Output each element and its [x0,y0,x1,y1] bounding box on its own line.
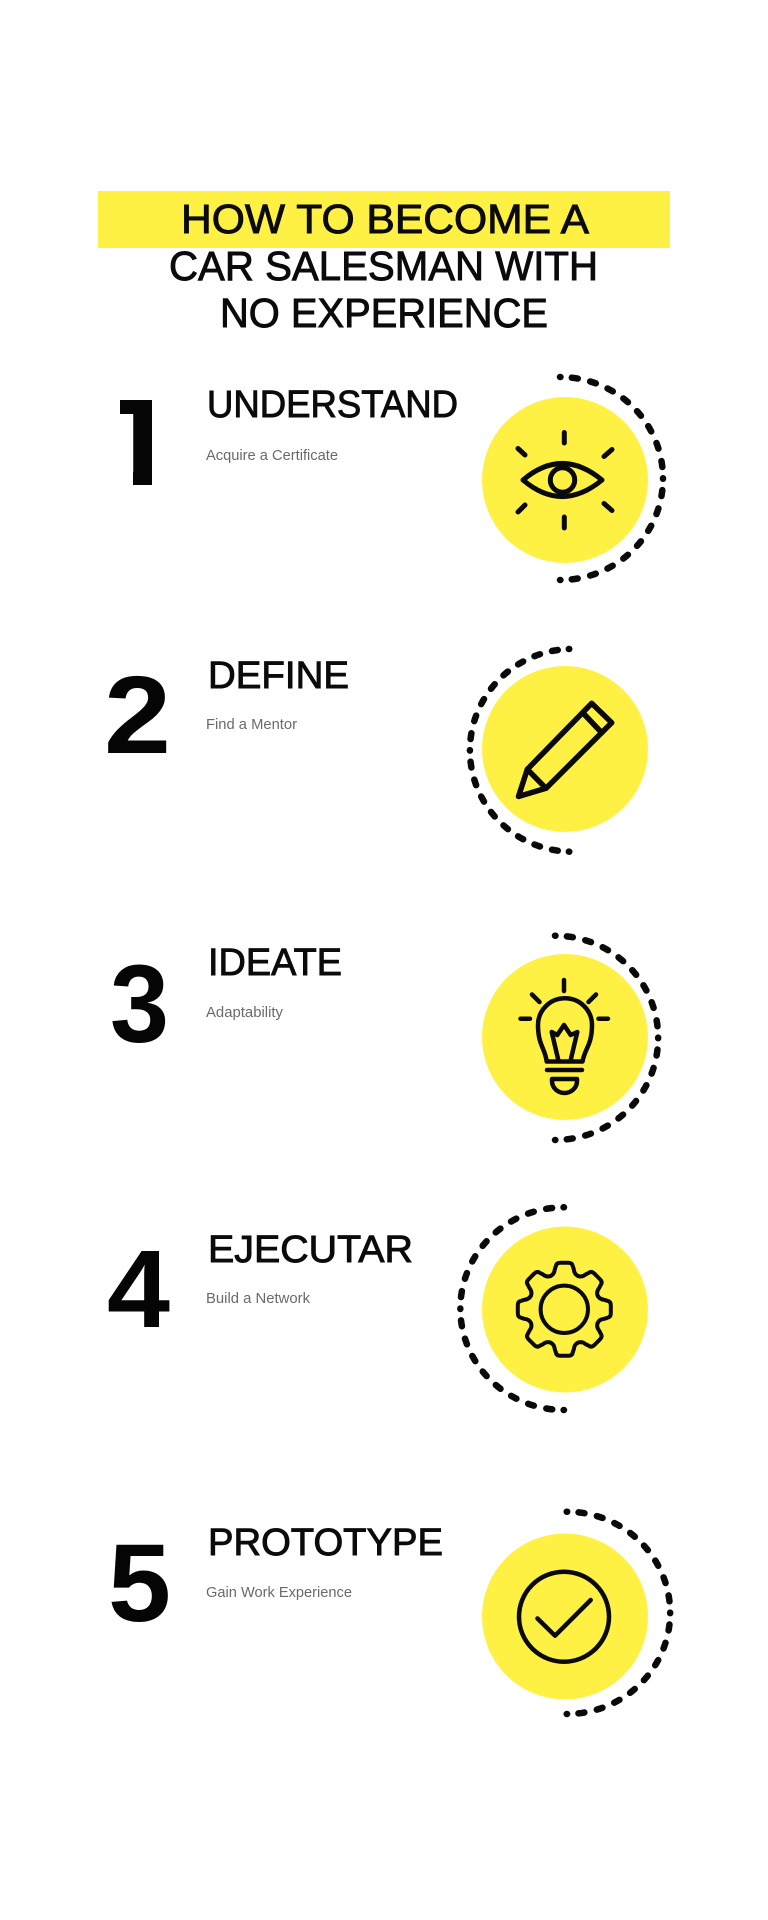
number 4: 4 [107,1228,170,1351]
dashed arc [460,1207,564,1410]
title line 2: CAR SALESMAN WITH [169,243,598,289]
yellow circle [482,1534,648,1700]
heading: define: DEFINE [208,655,349,697]
title highlight bar [98,191,670,248]
subtitle: build a network: Build a Network [206,1290,310,1307]
heading: ideate: IDEATE [208,942,342,984]
step 1: understand [98,373,663,580]
subtitle: adaptability: Adaptability [206,1004,283,1021]
heading: prototype: PROTOTYPE [208,1522,443,1564]
subtitle: find a mentor: Find a Mentor [206,716,297,733]
title block [98,191,670,336]
heading: understand: UNDERSTAND [207,384,458,426]
step 4: ejecutar [107,1207,648,1410]
yellow circle [482,1226,648,1392]
title line 3: NO EXPERIENCE [220,290,548,336]
yellow circle [482,397,648,563]
number 2: 2 [104,654,171,777]
subtitle: gain work experience: Gain Work Experience [206,1584,352,1601]
icon: check mark in circle [519,1572,609,1662]
step 2: define [104,649,648,852]
number 1: 1 [98,373,182,512]
icon: eye [518,432,612,528]
heading: ejecutar: EJECUTAR [208,1229,413,1271]
number 5: 5 [108,1522,171,1645]
number 1 [120,400,152,485]
subtitle: acquire a certificate: Acquire a Certificate [206,447,338,464]
dashed arc [567,1512,670,1714]
step 5: prototype [108,1512,670,1714]
yellow circle [482,666,648,832]
step 3: ideate [110,936,658,1140]
number 3: 3 [110,943,169,1066]
dashed arc [470,649,569,852]
icon: gear [518,1263,611,1356]
yellow circle [482,954,648,1120]
icon: pencil [518,703,612,796]
title line 1: HOW TO BECOME A [181,196,590,242]
icon: light bulb [520,980,608,1093]
dashed arc [560,377,663,580]
dashed arc [555,936,658,1140]
